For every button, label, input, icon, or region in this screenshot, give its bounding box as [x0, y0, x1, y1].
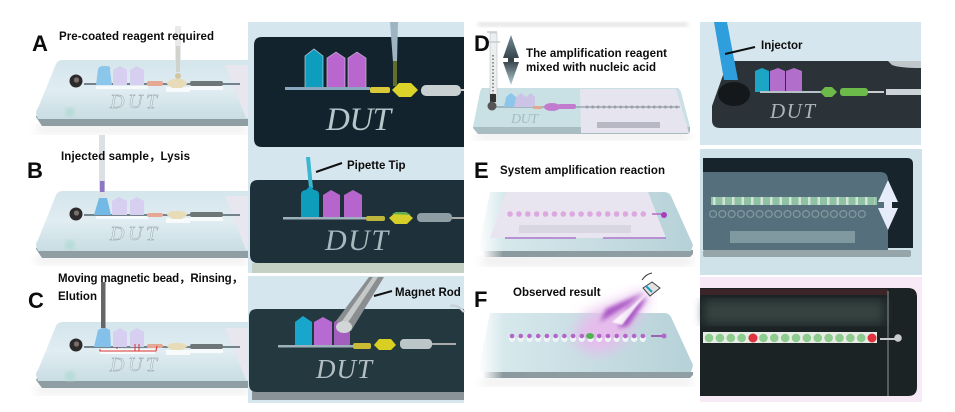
- icon: purple chamber 2: [524, 93, 535, 107]
- icon: double arrow: [503, 35, 519, 85]
- positive green dot: [586, 333, 594, 339]
- label: Pipette Tip: Pipette Tip: [347, 160, 406, 172]
- white result strip: [703, 332, 877, 343]
- outlet pin: [880, 334, 902, 342]
- panel: photo E: [700, 149, 922, 275]
- microchannel: [283, 212, 464, 224]
- label F: F: [474, 287, 487, 312]
- icon: channel segments: [147, 343, 223, 350]
- DUT engraving: DUT: [315, 354, 374, 384]
- heading C: [58, 273, 243, 303]
- chambers: [295, 316, 350, 347]
- green reaction dots: [709, 334, 872, 342]
- label B: B: [27, 158, 43, 183]
- icon: channel segments: [147, 79, 223, 88]
- red positive dots: [748, 334, 876, 342]
- heading D: mixed with nucleic acid: [526, 62, 656, 74]
- icon: channel segments: [533, 103, 576, 111]
- panel: D schematic: [473, 22, 690, 140]
- panel: photo A: [248, 22, 464, 147]
- leader line: [316, 163, 342, 172]
- panel: B schematic: [36, 135, 248, 265]
- label C: C: [28, 288, 44, 313]
- icon: blue chamber: [94, 327, 111, 347]
- icon: inlet ring: [70, 74, 82, 88]
- heading D: The amplification reagent: [526, 48, 667, 60]
- red bead path: [100, 344, 157, 351]
- reaction dots: [512, 336, 643, 339]
- icon: injector ring: [718, 82, 750, 106]
- icon: purple chamber 1: [514, 93, 526, 107]
- icon: purple chamber 2: [130, 197, 144, 215]
- label D: D: [474, 31, 490, 56]
- panel: photo C: [248, 276, 464, 403]
- icon: pipette: [99, 135, 105, 197]
- panel: C schematic: [36, 282, 248, 395]
- ring row: [713, 210, 871, 218]
- microchannel: [285, 83, 464, 97]
- panel: photo D: [700, 22, 921, 145]
- microchannel: [278, 339, 456, 350]
- icon: magnet rod: [101, 282, 106, 328]
- panel: photo B: [248, 147, 464, 273]
- chambers: [305, 49, 366, 89]
- icon: purple chamber 2: [130, 328, 144, 347]
- panel: F schematic: [478, 273, 693, 386]
- leader line: [374, 291, 392, 296]
- icon: pipette: [175, 26, 181, 79]
- icon: injector tube: [714, 22, 738, 80]
- icon: inlet ring: [70, 208, 82, 220]
- DUT engraving: DUT: [325, 102, 394, 138]
- heading D: [526, 48, 667, 74]
- heading F: Observed result: [513, 287, 601, 299]
- icon: purple chamber 1: [113, 66, 127, 85]
- DUT engraving: DUT: [324, 224, 390, 257]
- green reaction band: [711, 197, 877, 205]
- heading C: Elution: [58, 291, 97, 303]
- icon: blue chamber: [504, 93, 516, 107]
- bottom strip: [730, 231, 855, 243]
- icon: syringe: [487, 32, 500, 110]
- DUT engraving: DUT: [109, 91, 159, 113]
- icon: blue chamber: [96, 66, 112, 85]
- heading E: System amplification reaction: [500, 165, 665, 177]
- reaction dots: [510, 211, 645, 217]
- icon: inlet ring: [70, 338, 82, 352]
- icon: purple chamber 1: [112, 197, 127, 215]
- heading A: Pre-coated reagent required: [59, 31, 214, 43]
- icon: magnet rod: [336, 277, 384, 333]
- label: Injector: Injector: [761, 40, 803, 52]
- heading C: Moving magnetic bead，Rinsing，: [58, 273, 243, 285]
- label: Magnet Rod: Magnet Rod: [395, 287, 461, 299]
- icon: eye: [642, 273, 660, 296]
- label A: A: [32, 31, 48, 56]
- DUT engraving: DUT: [109, 354, 159, 376]
- label E: E: [474, 158, 489, 183]
- chambers: [301, 186, 362, 219]
- DUT engraving: DUT: [109, 223, 159, 245]
- purple light cone: [572, 291, 650, 355]
- outlet: [652, 212, 667, 218]
- icon: purple chamber 1: [113, 328, 127, 347]
- panel: photo F: [700, 277, 922, 402]
- panel: A schematic: [36, 26, 248, 134]
- pipette tip: [306, 157, 313, 188]
- heading B: Injected sample，Lysis: [61, 151, 190, 163]
- pipette tip: [390, 22, 398, 62]
- chambers: [755, 68, 802, 92]
- icon: blue chamber: [94, 198, 111, 215]
- icon: channel segments: [147, 211, 223, 219]
- DUT engraving: DUT: [510, 112, 539, 127]
- reaction dots: [587, 106, 678, 108]
- microchannel: [760, 87, 921, 97]
- panel: E schematic: [478, 192, 693, 266]
- leader line: [725, 47, 755, 54]
- outlet: [651, 334, 666, 338]
- DUT engraving: DUT: [769, 99, 816, 123]
- icon: white double arrow: [878, 180, 898, 230]
- icon: purple chamber 2: [130, 66, 144, 85]
